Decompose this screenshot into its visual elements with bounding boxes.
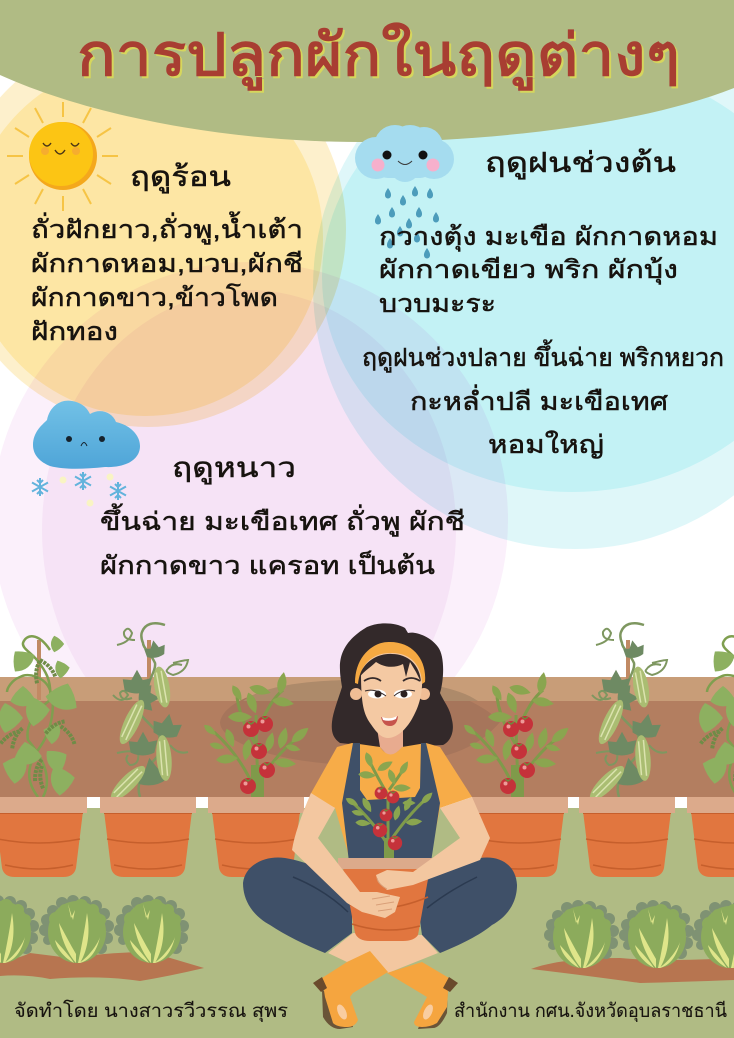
footer: author: จัดทำโดย นางสาวรวีวรรณ สุพร — [14, 999, 288, 1023]
flower pots row — [0, 797, 734, 877]
lettuce row left — [0, 895, 189, 963]
text block: summer vegetables: ผักกาดหอม,บวบ,ผักชี — [31, 250, 303, 278]
text block: late rainy vegetables: กะหล่ำปลี มะเขือเทศ — [410, 384, 668, 416]
title banner — [0, 0, 734, 142]
text block: early rainy vegetables: กวางตุ้ง มะเขือ ผักกาดหอม — [379, 223, 718, 252]
plant: bean left — [0, 636, 83, 797]
hair — [332, 623, 453, 747]
text block: late rainy vegetables: ฤดูฝนช่วงปลาย ขึ้นฉ่าย พริกหยวก — [362, 339, 724, 373]
text block: summer vegetables: ฝักทอง — [31, 318, 118, 346]
circle: rainy season background — [313, 25, 734, 549]
text block: winter vegetables: ผักกาดขาว แครอท เป็นต้น — [100, 550, 435, 580]
text block: summer vegetables: ถั่วฝักยาว,ถั่วพู,น้ำเต้า — [31, 211, 303, 245]
text block: winter vegetables: ขึ้นฉ่าย มะเขือเทศ ถั่วพู ผักชี — [100, 503, 465, 537]
plant: tomato left — [202, 671, 311, 798]
eyes and brows — [364, 678, 420, 698]
text block: summer vegetables: ผักกาดขาว,ข้าวโพด — [31, 283, 278, 312]
fringe — [358, 654, 421, 682]
text block: late rainy vegetables — [362, 339, 724, 459]
text block: early rainy vegetables — [379, 223, 718, 318]
title: การปลูกผักในฤดูต่างๆ — [77, 22, 680, 90]
arms and hands — [292, 793, 400, 918]
legs — [243, 857, 352, 953]
neck — [376, 722, 403, 758]
text block: winter vegetables — [100, 503, 465, 580]
heading: summer: ฤดูร้อน — [130, 161, 231, 194]
soil bed right — [531, 958, 734, 983]
headband — [355, 642, 425, 684]
shirt — [310, 743, 472, 860]
heading: winter: ฤดูหนาว — [172, 452, 296, 485]
text block: summer vegetables — [31, 211, 303, 346]
overalls bib — [342, 743, 440, 862]
ears — [350, 688, 430, 700]
fence wall — [0, 677, 734, 797]
mouth — [381, 716, 398, 726]
text block: early rainy vegetables: บวบมะระ — [379, 290, 496, 318]
shins — [328, 933, 438, 973]
circle: summer season background — [0, 31, 346, 427]
boots — [313, 951, 458, 1029]
held pot — [343, 868, 430, 941]
soil bed left — [0, 952, 204, 981]
face — [361, 650, 422, 738]
icon: rain cloud — [355, 125, 454, 258]
plant: tomato right — [462, 671, 571, 798]
plant: cucumber right — [585, 623, 667, 805]
footer: office: สำนักงาน กศน.จังหวัดอุบลราชธานี — [454, 1000, 727, 1023]
icon: snow cloud — [32, 401, 140, 506]
ground — [0, 808, 734, 1038]
heading: early rainy season: ฤดูฝนช่วงต้น — [485, 147, 676, 180]
text block: early rainy vegetables: ผักกาดเขียว พริก ผักบุ้ง — [379, 256, 678, 285]
icon: sun — [7, 102, 118, 211]
plant: cucumber left — [106, 623, 188, 805]
lettuce row right — [544, 900, 734, 968]
woman gardener — [243, 623, 517, 1029]
plant: bean right — [698, 636, 734, 797]
held plant — [344, 751, 435, 858]
circle: winter season background — [0, 262, 508, 778]
text block: late rainy vegetables: หอมใหญ่ — [488, 430, 604, 459]
